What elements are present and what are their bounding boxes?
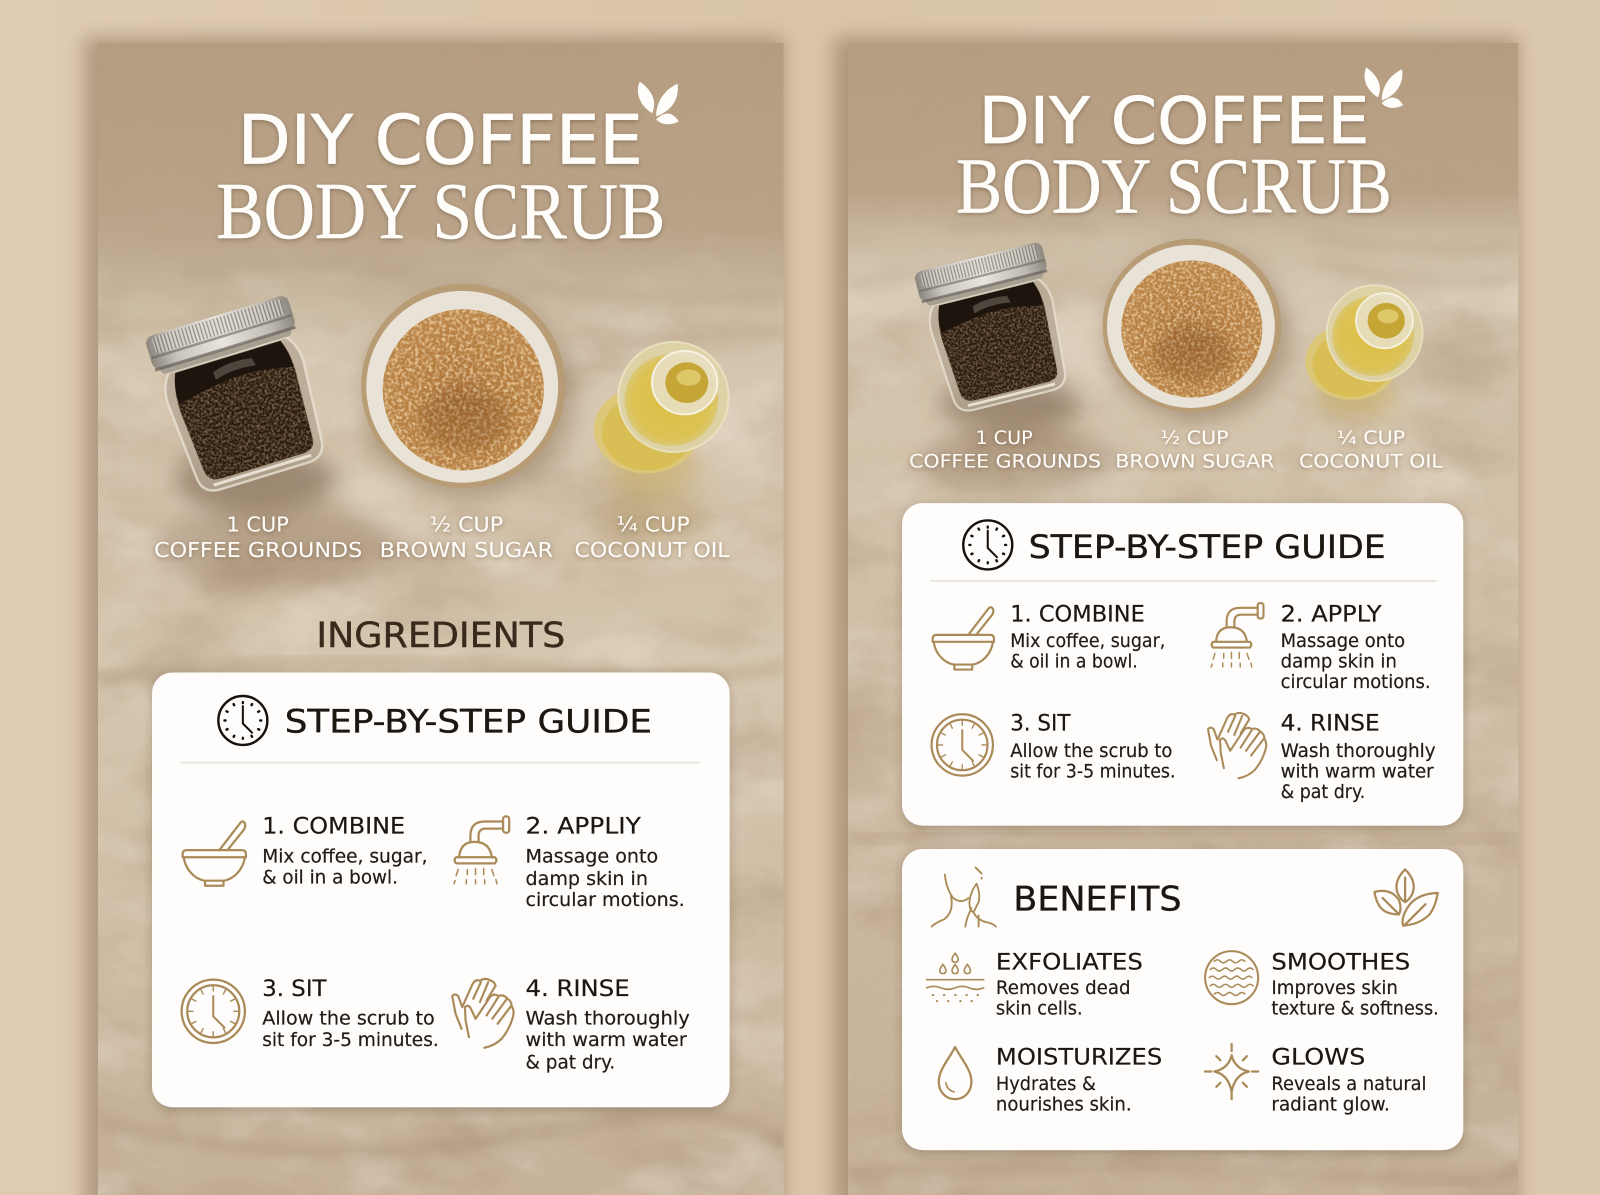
icon: clock [218, 696, 267, 745]
icon: leaves [1374, 869, 1438, 926]
icon: clock [963, 520, 1012, 569]
step 3: Allow the scrub to [262, 1009, 435, 1030]
benefit: moisturizes [939, 1044, 1162, 1115]
heading: step-by-step guide: STEP-BY-STEP GUIDE [285, 705, 652, 741]
title: BODY SCRUB [956, 142, 1392, 230]
benefit: glows: GLOWS [1271, 1044, 1365, 1070]
photo: bowl of brown sugar [1103, 239, 1289, 421]
benefit: moisturizes: MOISTURIZES [996, 1044, 1162, 1070]
step 2: circular motions. [1281, 672, 1431, 693]
card: step-by-step guide [902, 503, 1463, 826]
step 3: 3. SIT [262, 976, 327, 1002]
benefit: glows [1205, 1044, 1427, 1115]
step 4: Wash thoroughly [526, 1009, 690, 1030]
ingredient labels: ¼ CUP [616, 513, 690, 537]
title: DIY COFFEE [238, 100, 643, 179]
step 3 [932, 711, 1176, 783]
step 1: 1. COMBINE [1010, 601, 1145, 627]
ingredient labels [154, 513, 730, 562]
right linen background [848, 43, 1519, 1195]
icon: neck and hand [932, 867, 996, 927]
icon: leaves [1364, 67, 1403, 108]
benefit: exfoliates: skin cells. [996, 998, 1083, 1019]
step 2 [454, 814, 685, 911]
step 3: sit for 3-5 minutes. [1010, 762, 1176, 783]
ingredient labels: BROWN SUGAR [380, 538, 553, 562]
step 1: Mix coffee, sugar, [262, 846, 428, 867]
benefit: exfoliates: Removes dead [996, 978, 1131, 999]
step 4 [452, 976, 690, 1073]
photo: coconut oil bottle [594, 342, 729, 494]
benefit: exfoliates [927, 949, 1143, 1019]
step 2: Massage onto [526, 846, 658, 867]
heading: benefits: BENEFITS [1013, 879, 1182, 918]
step 2: 2. APPLY [1281, 601, 1382, 627]
photo: jar of coffee grounds [144, 294, 337, 512]
ingredient labels: COFFEE GROUNDS [154, 538, 362, 562]
ingredient labels: 1 CUP [976, 427, 1033, 449]
step 3: sit for 3-5 minutes. [262, 1030, 439, 1051]
icon: leaves [638, 82, 679, 124]
benefit: smoothes: SMOOTHES [1271, 949, 1410, 975]
ingredient labels: COFFEE GROUNDS [909, 450, 1101, 472]
step 2: Massage onto [1281, 631, 1405, 652]
step 2: 2. APPLIY [526, 814, 641, 840]
ingredient labels: COCONUT OIL [1299, 450, 1443, 472]
step 4: & pat dry. [526, 1052, 615, 1073]
step 4: 4. RINSE [1281, 711, 1380, 737]
step 3: Allow the scrub to [1010, 741, 1172, 762]
step 4: with warm water [1281, 762, 1434, 783]
step 4: & pat dry. [1281, 782, 1365, 803]
step 4: Wash thoroughly [1281, 741, 1436, 762]
heading: ingredients: INGREDIENTS [316, 616, 565, 656]
title [956, 84, 1392, 230]
benefit: smoothes: texture & softness. [1271, 998, 1439, 1019]
benefit: glows: radiant glow. [1271, 1094, 1390, 1115]
ingredient labels: COCONUT OIL [574, 538, 730, 562]
card: step-by-step guide [152, 673, 730, 1107]
step 4: with warm water [526, 1030, 687, 1051]
left linen background [98, 43, 784, 1195]
ingredient labels: ¼ CUP [1337, 427, 1405, 449]
ingredient labels [909, 427, 1443, 472]
benefit: moisturizes: Hydrates & [996, 1074, 1096, 1095]
title: BODY SCRUB [216, 167, 665, 256]
photo: bowl of brown sugar [361, 284, 574, 498]
card: benefits [902, 849, 1463, 1150]
benefit: smoothes [1205, 949, 1439, 1019]
benefit: moisturizes: nourishes skin. [996, 1094, 1132, 1115]
panel: left poster [84, 37, 784, 1195]
benefit: exfoliates: EXFOLIATES [996, 949, 1143, 975]
step 4: 4. RINSE [526, 976, 630, 1002]
step 2: damp skin in [526, 869, 648, 890]
step 2: damp skin in [1281, 651, 1397, 672]
ingredient labels: BROWN SUGAR [1115, 450, 1274, 472]
step 3: 3. SIT [1010, 711, 1071, 737]
step 2 [1211, 601, 1431, 693]
step 1 [933, 601, 1165, 672]
benefit: glows: Reveals a natural [1271, 1074, 1427, 1095]
ingredient labels: ½ CUP [1160, 427, 1229, 449]
benefit: smoothes: Improves skin [1271, 978, 1398, 999]
step 3 [182, 976, 439, 1051]
title: DIY COFFEE [979, 84, 1369, 159]
step 1: 1. COMBINE [262, 814, 405, 840]
step 1 [183, 814, 428, 889]
step 1: & oil in a bowl. [1010, 651, 1138, 672]
ingredient labels: 1 CUP [227, 513, 289, 537]
step 1: & oil in a bowl. [262, 868, 398, 889]
panel: right poster [834, 37, 1519, 1195]
photo: jar of coffee grounds [913, 241, 1082, 430]
photo: coconut oil bottle [1305, 285, 1423, 417]
step 2: circular motions. [526, 890, 685, 911]
step 4 [1208, 711, 1436, 803]
step 1: Mix coffee, sugar, [1010, 631, 1165, 652]
title [216, 100, 665, 256]
ingredient labels: ½ CUP [430, 513, 503, 537]
heading: step-by-step guide: STEP-BY-STEP GUIDE [1029, 530, 1386, 566]
